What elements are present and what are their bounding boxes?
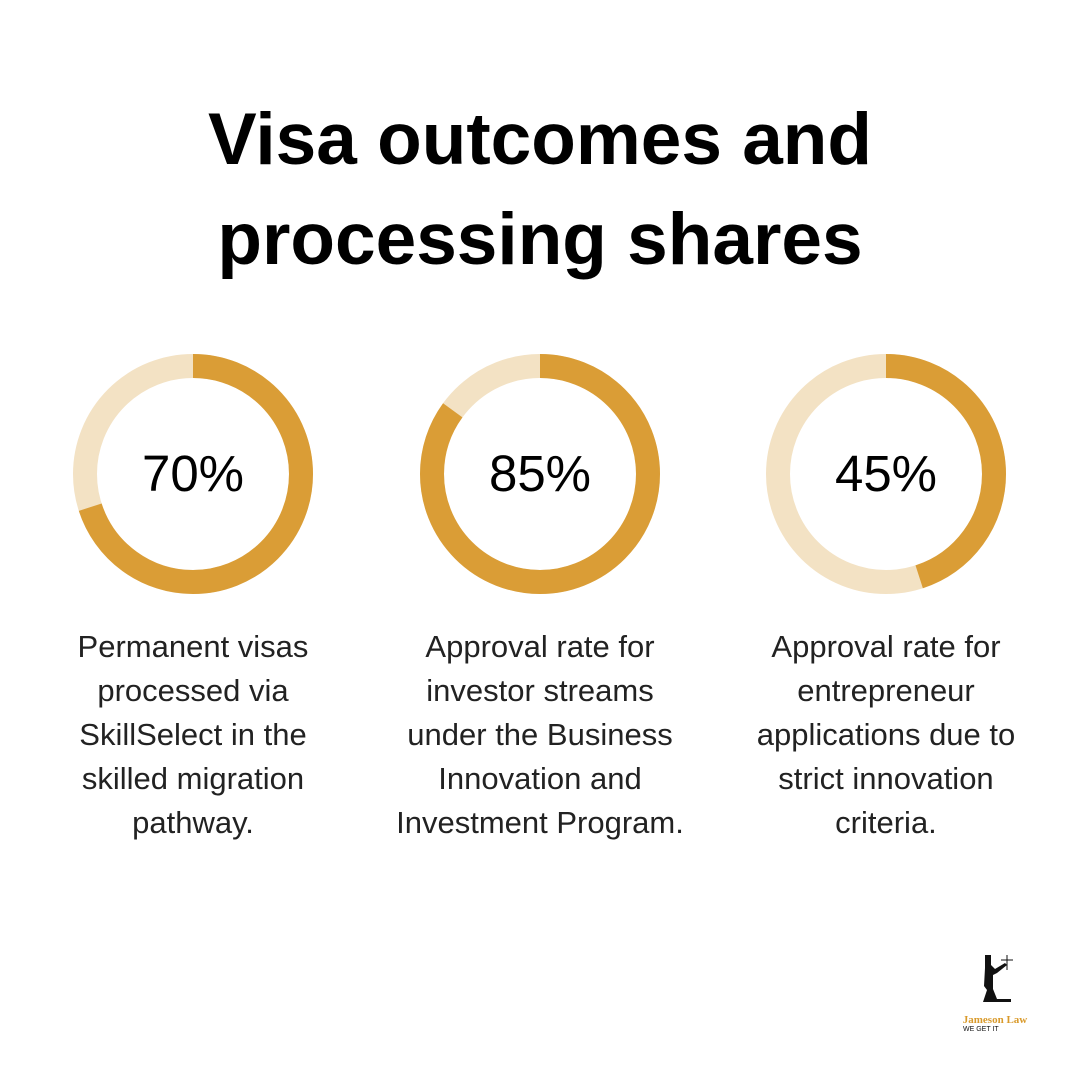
donut: 85% <box>420 354 660 594</box>
donut: 70% <box>73 354 313 594</box>
title: processing shares <box>217 199 863 280</box>
text: 70% description: SkillSelect in the <box>79 717 307 752</box>
text: 45% description <box>757 629 1015 840</box>
text: 70% description: pathway. <box>132 805 254 840</box>
logo <box>963 955 1028 1033</box>
donut: 70%: 70% <box>142 445 244 502</box>
title <box>208 99 872 280</box>
donut: 85%: 85% <box>489 445 591 502</box>
text: 70% description <box>78 629 308 840</box>
text: 85% description <box>396 629 684 840</box>
text: brand: Jameson Law <box>963 1014 1027 1026</box>
title: Visa outcomes and <box>208 99 872 180</box>
text: 70% description: skilled migration <box>82 761 304 796</box>
text: 45% description: entrepreneur <box>797 673 975 708</box>
icon: lady justice <box>983 955 1013 1002</box>
donut: 45%: 45% <box>835 445 937 502</box>
logo: WE GET IT <box>963 1026 999 1033</box>
text: 70% description: Permanent visas <box>78 629 308 664</box>
text: 45% description: applications due to <box>757 717 1015 752</box>
text: 85% description: Innovation and <box>438 761 642 796</box>
text: 85% description: under the Business <box>407 717 673 752</box>
text: 45% description: Approval rate for <box>771 629 1001 664</box>
text: 70% description: processed via <box>97 673 289 708</box>
text: 85% description: Investment Program. <box>396 805 684 840</box>
text: 45% description: criteria. <box>835 805 937 840</box>
text: 45% description: strict innovation <box>778 761 994 796</box>
donut: 45% <box>766 354 1006 594</box>
text: 85% description: investor streams <box>426 673 654 708</box>
text: 85% description: Approval rate for <box>425 629 655 664</box>
